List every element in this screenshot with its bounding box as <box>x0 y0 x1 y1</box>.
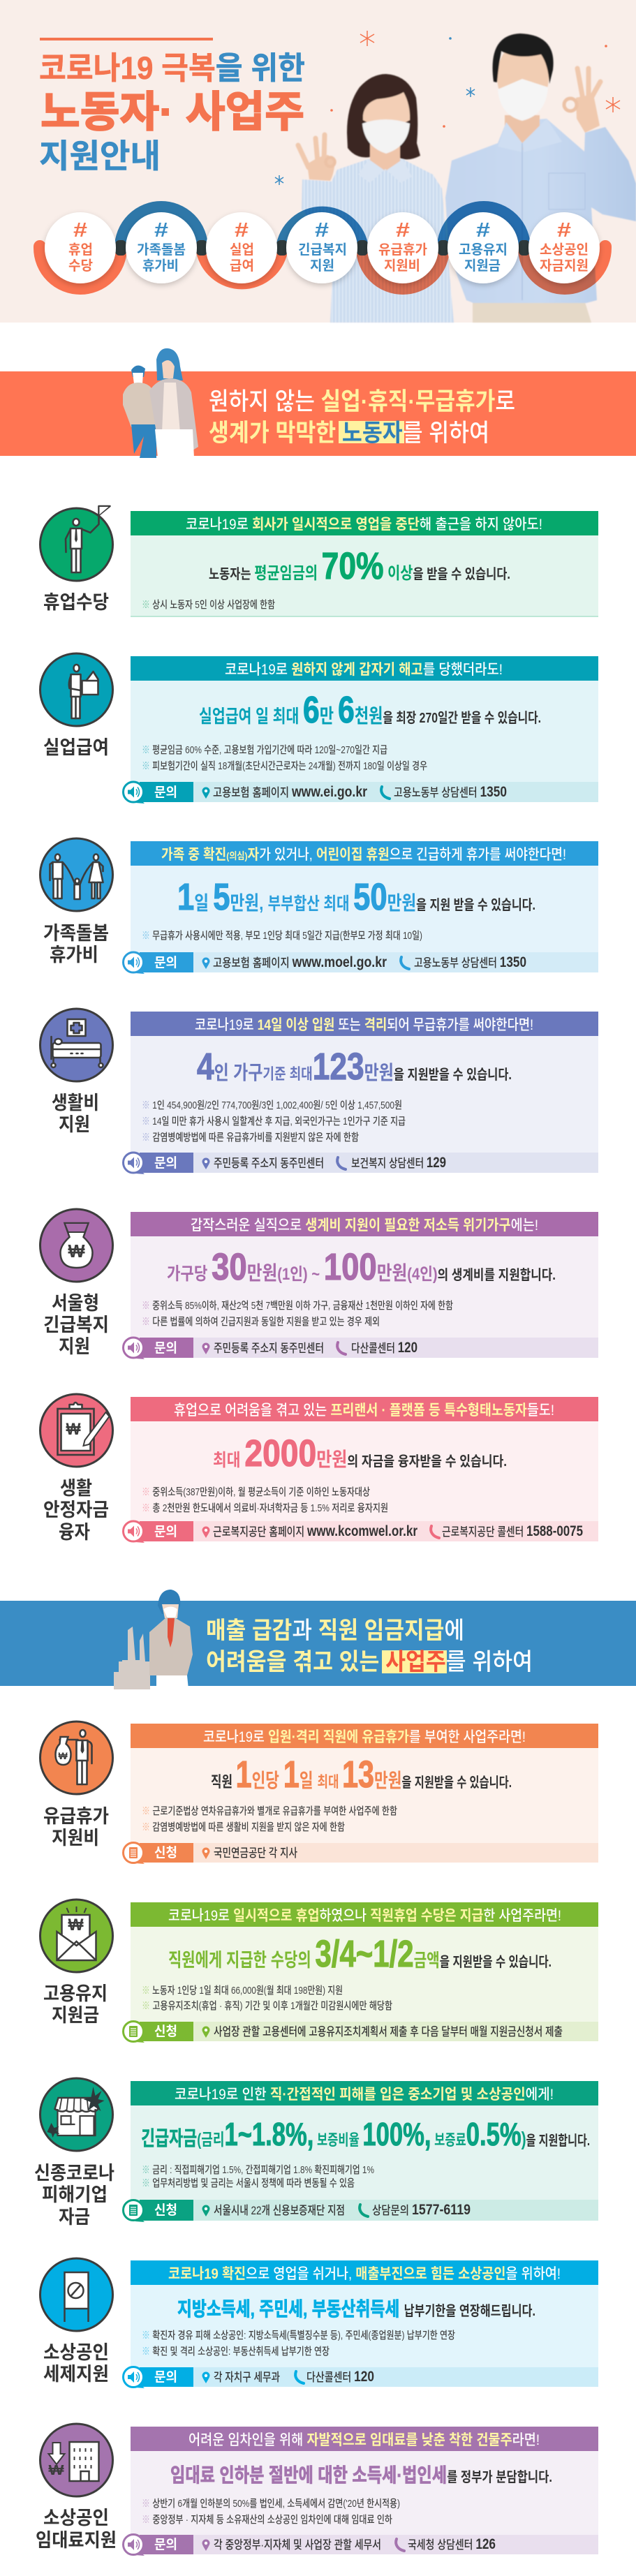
body <box>131 535 598 617</box>
label <box>43 1478 109 1543</box>
notes: ※ 금리 : 직접피해기업 1.5%, 간접피해기업 1.8% 확진피해기업 1% <box>142 2164 374 2176</box>
header <box>131 2427 598 2451</box>
inquiry strip: 문의 <box>154 785 177 800</box>
hashtag: 가족돌봄휴가비: 휴가비 <box>142 258 179 274</box>
application strip: 신청 <box>154 2024 177 2039</box>
application strip <box>123 2022 598 2043</box>
banner heading: 어려움을 겪고 있는 사업주를 위하여 <box>206 1649 533 1675</box>
notes <box>142 2330 455 2357</box>
header: 코로나19로 입원·격리 직원에 유급휴가를 부여한 사업주라면! <box>203 1729 526 1745</box>
icon: person carrying box <box>40 653 113 726</box>
label: 유급휴가 <box>43 1806 109 1827</box>
label: 긴급복지 <box>43 1315 109 1335</box>
hashtag: 긴급복지지원 <box>286 212 357 283</box>
icon: damaged store <box>40 2078 113 2151</box>
main message: 최대 2000만원의 자금을 융자받을 수 있습니다. <box>213 1433 507 1474</box>
hashtag: 소상공인자금지원: 소상공인 <box>540 242 589 258</box>
inquiry strip: 고용노동부 상담센터 1350 <box>414 954 526 970</box>
panel: 소상공인 임대료지원 <box>36 2424 598 2556</box>
inquiry strip <box>123 782 598 804</box>
hashtag: 긴급복지지원: 긴급복지 <box>298 242 347 258</box>
label: 자금 <box>59 2207 90 2228</box>
icon: envelope with won <box>40 1900 113 1972</box>
illustration: masked businessman and skyline <box>114 1590 193 1689</box>
hashtag: 고용유지지원금: 지원금 <box>464 258 501 274</box>
inquiry strip <box>123 2367 598 2388</box>
title: 노동자· 사업주 <box>40 88 304 135</box>
header <box>131 511 598 535</box>
main message: 긴급자금(금리1~1.8%, 보증비율 100%, 보증료0.5%)을 지원합니다. <box>141 2116 590 2152</box>
hashtag: 소상공인자금지원: # <box>557 219 571 242</box>
label <box>34 2163 114 2228</box>
title <box>39 50 305 175</box>
main message: 직원 1인당 1일 최대 13만원을 지원받을 수 있습니다. <box>211 1754 512 1796</box>
icon: building with down arrow <box>40 2424 113 2496</box>
icon: person with flag <box>40 506 113 581</box>
inquiry strip: 다산콜센터 120 <box>351 1340 417 1356</box>
icon: family holding hands <box>40 838 113 911</box>
header <box>131 1724 598 1748</box>
inquiry strip: 문의 <box>154 955 177 970</box>
label: 휴업수당 <box>43 592 109 613</box>
header <box>131 1397 598 1421</box>
decorative stars <box>275 31 620 185</box>
notes: ※ 평균임금 60% 수준, 고용보험 가입기간에 따라 120일~270일간 지급 <box>142 744 387 756</box>
notes: ※ 14일 미만 휴가 사용시 일할계산 후 지급, 외국인가구는 1인가구 기준 지급 <box>142 1116 406 1127</box>
label: 지원금 <box>52 2005 99 2026</box>
hashtag: 소상공인자금지원: 자금지원 <box>540 258 589 274</box>
notes: ※ 확진자 경유 피해 소상공인: 지방소득세(특별징수분 등), 주민세(종업원분) 납부기한 연장 <box>142 2330 455 2341</box>
inquiry strip: 주민등록 주소지 동주민센터 <box>214 1342 324 1355</box>
panel: 고용유지 지원금 <box>40 1900 598 2043</box>
inquiry strip: 각 자치구 세무과 <box>214 2371 280 2384</box>
panel: 유급휴가 지원비 <box>40 1722 598 1864</box>
label <box>43 1983 108 2026</box>
inquiry strip <box>123 1338 598 1359</box>
label: 신종코로나 <box>34 2163 114 2184</box>
body <box>131 866 598 972</box>
notes: ※ 감염병예방법에 따른 생활비 지원을 받지 않은 자에 한함 <box>142 1821 345 1833</box>
application strip: 신청 <box>154 2203 177 2218</box>
header <box>131 1212 598 1236</box>
accent line <box>40 38 213 40</box>
hashtag: 고용유지지원금: 고용유지 <box>459 242 508 258</box>
label <box>43 1806 109 1849</box>
application strip: 서울시내 22개 신용보증재단 지점 <box>214 2204 345 2217</box>
banner heading: 원하지 않는 실업·휴직·무급휴가로 <box>209 388 515 415</box>
panel: 소상공인 세제지원 <box>40 2258 598 2388</box>
header <box>131 841 598 866</box>
inquiry strip: 근로복지공단 홈페이지 www.kcomwel.or.kr <box>213 1523 417 1539</box>
application strip: 신청 <box>154 1845 177 1860</box>
label: 생활비 <box>52 1093 99 1113</box>
hashtag: 유급휴가지원비 <box>367 212 438 283</box>
header: 코로나19로 회사가 일시적으로 영업을 중단해 출근을 하지 않아도! <box>186 517 542 533</box>
inquiry strip: 문의 <box>154 1340 177 1356</box>
label: 지원비 <box>52 1828 99 1849</box>
main message: 1일 5만원, 부부합산 최대 50만원을 지원 받을 수 있습니다. <box>177 876 535 918</box>
label: 소상공인 <box>43 2508 109 2529</box>
notes: ※ 근로기준법상 연차유급휴가와 별개로 유급휴가를 부여한 사업주에 한함 <box>142 1805 397 1817</box>
header: 휴업으로 어려움을 겪고 있는 프리랜서 · 플랫폼 등 특수형태노동자들도! <box>174 1402 554 1419</box>
body <box>131 1927 598 2041</box>
label: 서울형 <box>52 1293 99 1314</box>
notes: ※ 중위소득 85%이하, 재산2억 5천 7백만원 이하 가구, 금융재산 1천만원 이하인 자에 한함 <box>142 1300 453 1312</box>
label: 실업급여 <box>43 737 109 758</box>
inquiry strip <box>123 1521 598 1543</box>
hashtag: 휴업수당 <box>45 212 116 283</box>
banner: employers <box>0 1590 636 1689</box>
panel: 휴업수당 <box>40 506 598 617</box>
inquiry strip: 문의 <box>154 1155 177 1171</box>
application strip <box>123 2200 598 2222</box>
main message: 지방소득세, 주민세, 부동산취득세 납부기한을 연장해드립니다. <box>177 2298 535 2320</box>
panel: 서울형 긴급복지 지원 <box>40 1209 598 1359</box>
inquiry strip: 고용노동부 상담센터 1350 <box>394 784 507 800</box>
panel: 가족돌봄휴가비 <box>40 838 598 974</box>
banner heading <box>209 388 515 447</box>
inquiry strip: 주민등록 주소지 동주민센터 <box>214 1157 324 1170</box>
header <box>131 656 598 681</box>
notes <box>142 1805 397 1833</box>
main message: 노동자는 평균임금의 70% 이상을 받을 수 있습니다. <box>209 545 510 587</box>
header: 어려운 임차인을 위해 자발적으로 임대료를 낮춘 착한 건물주라면! <box>188 2432 540 2448</box>
inquiry strip: 다산콜센터 120 <box>306 2369 374 2385</box>
notes <box>142 1486 388 1514</box>
body <box>131 1748 598 1863</box>
title: 지원안내 <box>39 138 161 175</box>
label <box>43 2342 109 2385</box>
hashtag connector arcs <box>40 207 605 288</box>
inquiry strip: 문의 <box>154 2537 177 2552</box>
hashtag: 고용유지지원금 <box>448 212 519 283</box>
hashtag: 실업급여 <box>206 212 277 283</box>
panel: 신종코로나 피해기업 자금 <box>34 2078 598 2228</box>
main message: 가구당 30만원(1인) ~ 100만원(4인)의 생계비를 지원합니다. <box>167 1246 556 1288</box>
header: 코로나19로 일시적으로 휴업하였으나 직원휴업 수당은 지급한 사업주라면! <box>168 1908 561 1924</box>
label: 세제지원 <box>43 2364 109 2385</box>
label: 생활 <box>60 1478 92 1499</box>
hashtag: 긴급복지지원: # <box>315 219 329 242</box>
inquiry strip: 문의 <box>154 1524 177 1539</box>
inquiry strip: 각 중앙정부·지자체 및 사업장 관할 세무서 <box>214 2538 381 2552</box>
panel: hero <box>0 0 636 323</box>
label: 임대료지원 <box>36 2530 117 2551</box>
main message: 4인 가구기준 최대123만원을 지원받을 수 있습니다. <box>197 1046 512 1088</box>
banner heading <box>206 1618 533 1675</box>
icon: clipboard and pen: ₩ <box>66 1420 81 1439</box>
hashtag: 유급휴가지원비: # <box>396 219 410 242</box>
notes: ※ 확진 및 격리 소상공인: 부동산취득세 납부기한 연장 <box>142 2346 330 2357</box>
notes <box>142 2164 374 2189</box>
note: ※ 상시 노동자 5인 이상 사업장에 한함 <box>142 599 275 611</box>
icon: person with money bag: ₩ <box>59 1750 68 1761</box>
label: 휴가비 <box>50 945 98 965</box>
label: 고용유지 <box>43 1983 108 2004</box>
label: 소상공인 <box>43 2342 109 2363</box>
hashtag: 고용유지지원금: # <box>476 219 490 242</box>
notes: ※ 중앙정부 · 지자체 등 소유재산의 소상공인 임차인에 대해 임대료 인하 <box>142 2514 392 2526</box>
notes: ※ 노동자 1인당 1일 최대 66,000원(월 최대 198만원) 지원 <box>142 1985 343 1997</box>
label: 지원 <box>59 1336 90 1357</box>
label: 가족돌봄 <box>43 923 109 944</box>
header <box>131 2260 598 2285</box>
notes: ※ 상반기 6개월 인하분의 50%를 법인세, 소득세에서 감면('20년 한시적용) <box>142 2498 400 2510</box>
icon: envelope with won: ₩ <box>68 1916 84 1934</box>
hashtag: 실업급여: 실업 <box>230 242 254 258</box>
banner heading: 생계가 막막한 노동자를 위하여 <box>209 420 489 447</box>
inquiry strip: 문의 <box>154 2369 177 2385</box>
body <box>131 1421 598 1541</box>
label: 지원 <box>59 1114 90 1135</box>
body <box>131 2105 598 2221</box>
application strip: 상담문의 1577-6119 <box>372 2202 471 2218</box>
body <box>131 1036 598 1173</box>
highlight box <box>382 1650 447 1673</box>
icon: money bag <box>40 1209 113 1282</box>
body <box>131 2285 598 2387</box>
hashtag: 유급휴가지원비: 유급휴가 <box>378 242 427 258</box>
arc joints <box>115 240 530 256</box>
notes: ※ 고용유지조치(휴업 · 휴직) 기간 및 이후 1개월간 미감원시에만 해당함 <box>142 2000 392 2012</box>
banner: workers <box>0 348 636 458</box>
label: 융자 <box>59 1522 90 1543</box>
inquiry strip: 고용보험 홈페이지 www.moel.go.kr <box>213 954 387 970</box>
inquiry strip: 고용보험 홈페이지 www.ei.go.kr <box>213 784 367 800</box>
notes: ※ 중위소득(387만원)이하, 월 평균소득이 기준 이하인 노동자대상 <box>142 1486 370 1498</box>
hashtag: 유급휴가지원비: 지원비 <box>384 258 420 274</box>
header <box>131 1012 598 1036</box>
icon: money bag: ₩ <box>68 1241 85 1261</box>
header: 갑작스러운 실직으로 생계비 지원이 필요한 저소득 위기가구에는! <box>191 1217 538 1234</box>
hashtag: 긴급복지지원: 지원 <box>310 258 334 274</box>
note: ※ 무급휴가 사용시에만 적용, 부모 1인당 최대 5일간 지급(한부모 가정 최대 10일) <box>142 930 422 942</box>
label <box>43 1293 109 1357</box>
icon: clipboard and pen <box>40 1394 113 1467</box>
label <box>52 1093 99 1135</box>
icon: person with money bag <box>40 1722 113 1794</box>
hashtag: 실업급여: # <box>235 219 249 242</box>
highlight box <box>339 421 404 443</box>
main message: 실업급여 일 최대 6만 6천원을 최장 270일간 받을 수 있습니다. <box>199 689 541 731</box>
photo: man with mask <box>445 34 636 323</box>
panel: 실업급여 <box>40 653 598 804</box>
main message: 임대료 인하분 절반에 대한 소득세·법인세를 정부가 분담합니다. <box>170 2464 552 2486</box>
header: 코로나19로 14일 이상 입원 또는 격리되어 무급휴가를 써야한다면! <box>195 1017 533 1033</box>
body <box>131 681 598 802</box>
inquiry strip: 근로복지공단 콜센터 1588-0075 <box>442 1523 583 1539</box>
notes: ※ 총 2천만원 한도내에서 의료비·자녀학자금 등 1.5% 저리로 융자지원 <box>142 1502 388 1514</box>
header <box>131 1902 598 1927</box>
hashtag: 실업급여: 급여 <box>230 258 254 274</box>
hashtag: 휴업수당: 수당 <box>68 258 93 274</box>
notes <box>142 744 427 772</box>
inquiry strip: 국세청 상담센터 126 <box>408 2536 496 2552</box>
label: 피해기업 <box>42 2184 108 2205</box>
main message: 직원에게 지급한 수당의 3/4~1/2금액을 지원받을 수 있습니다. <box>168 1933 552 1975</box>
hashtag: 소상공인자금지원 <box>528 212 600 283</box>
hashtag: 가족돌봄휴가비: # <box>154 219 168 242</box>
inquiry strip <box>123 1153 598 1174</box>
header: 코로나19로 원하지 않게 갑자기 해고를 당했더라도! <box>225 662 503 678</box>
header: 코로나19 확진으로 영업을 쉬거나, 매출부진으로 힘든 소상공인을 위하여! <box>168 2266 561 2282</box>
notes: ※ 업무처리방법 및 금리는 서울시 정책에 따라 변동될 수 있음 <box>142 2177 355 2189</box>
application strip <box>123 1843 598 1864</box>
panel: 생활안정자금 융자 <box>40 1394 598 1543</box>
application strip: 국민연금공단 각 지사 <box>214 1846 297 1860</box>
title: 코로나19 극복을 위한 <box>39 50 305 86</box>
label: 안정자금 <box>43 1500 109 1520</box>
notes: ※ 피보험기간이 실직 18개월(초단시간근로자는 24개월) 전까지 180일 이상일 경우 <box>142 760 427 772</box>
icon: closed sign board <box>40 2258 113 2331</box>
banner heading: 매출 급감과 직원 임금지급에 <box>206 1618 464 1644</box>
illustration: two masked people <box>123 348 198 458</box>
notes <box>142 1985 392 2012</box>
header <box>131 2081 598 2105</box>
hashtag: 휴업수당: # <box>73 219 87 242</box>
inquiry strip: 보건복지 상담센터 129 <box>351 1155 446 1171</box>
hashtag: 가족돌봄휴가비: 가족돌봄 <box>137 242 186 258</box>
notes <box>142 1300 453 1328</box>
header: 코로나19로 인한 직·간접적인 피해를 입은 중소기업 및 소상공인에게! <box>175 2087 554 2103</box>
notes: ※ 1인 454,900원/2인 774,700원/3인 1,002,400원/ 5인 이상 1,457,500원 <box>142 1100 402 1111</box>
notes <box>142 2498 400 2526</box>
notes: ※ 다른 법률에 의하여 긴급지원과 동일한 지원을 받고 있는 경우 제외 <box>142 1316 380 1328</box>
photo: woman with mask <box>298 74 454 323</box>
hashtag: 휴업수당: 휴업 <box>68 242 93 258</box>
icon: building with down arrow: ₩ <box>49 2463 64 2478</box>
label <box>43 923 109 965</box>
body <box>131 1236 598 1358</box>
inquiry strip <box>123 2534 598 2556</box>
hashtag: 가족돌봄휴가비 <box>126 212 197 283</box>
panel: 생활비지원 <box>40 1009 598 1174</box>
icon: hospital bed <box>40 1009 113 1081</box>
label <box>36 2508 117 2551</box>
inquiry strip <box>123 952 598 974</box>
body <box>131 2451 598 2554</box>
header: 가족 중 확진(의심)자가 있거나, 어린이집 휴원으로 긴급하게 휴가를 써야한다면! <box>161 847 566 863</box>
notes <box>142 1100 406 1143</box>
notes: ※ 감염병예방법에 따른 유급휴가비를 지원받지 않은 자에 한함 <box>142 1132 359 1143</box>
